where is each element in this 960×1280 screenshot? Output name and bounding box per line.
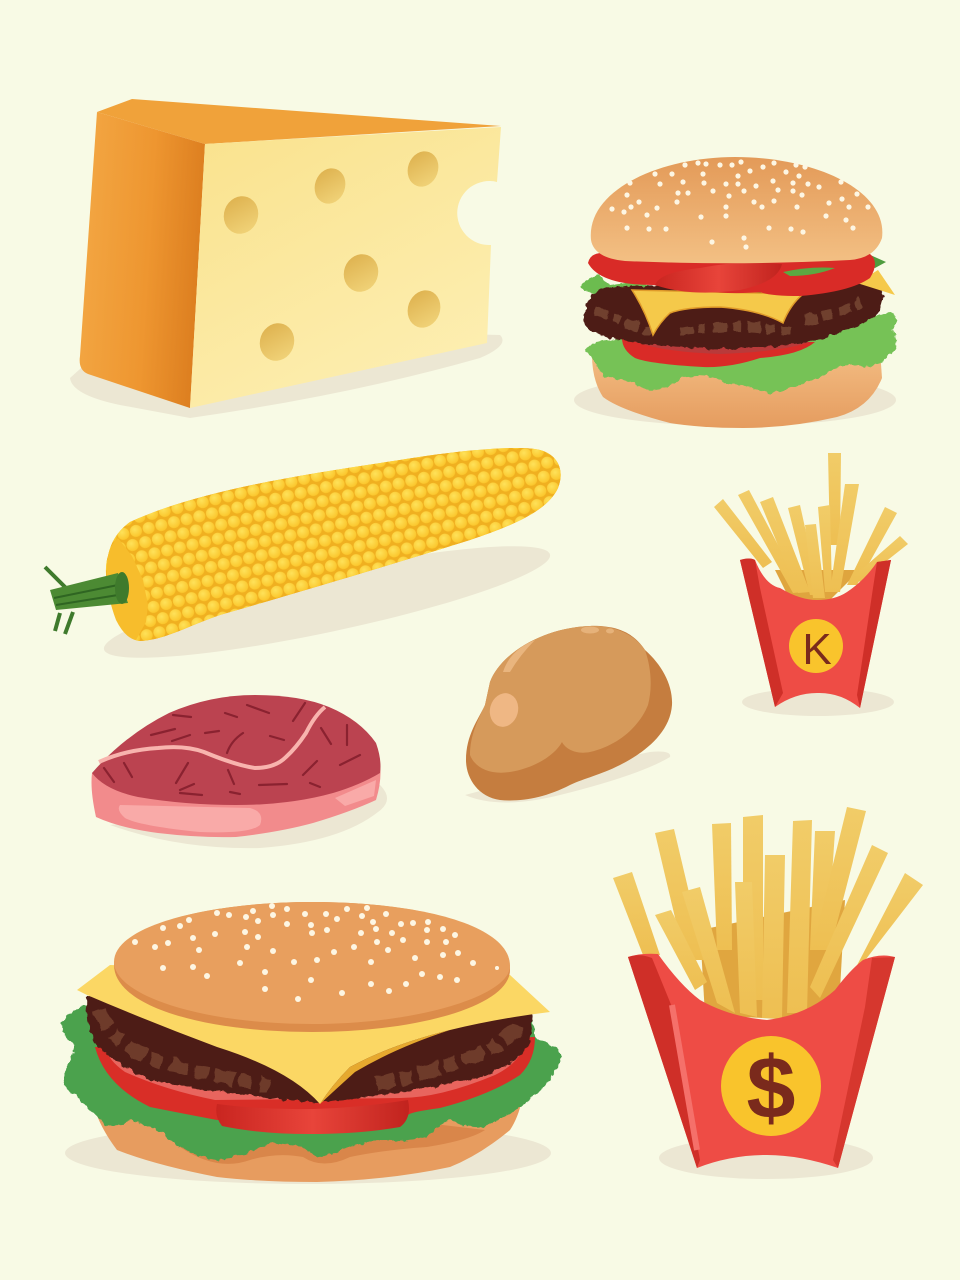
cheese: [77, 965, 550, 1104]
icon: large burger: [62, 902, 560, 1184]
patty: [584, 283, 884, 348]
icon: large fries: [613, 807, 923, 1179]
icon: small fries: [714, 453, 908, 716]
bottom bun: [592, 350, 882, 428]
corn base: [107, 538, 148, 640]
icon: cheese wedge: [70, 99, 502, 418]
icon: potato: [465, 626, 672, 802]
icon: small fries: K: [802, 625, 832, 674]
top tomato slices: [588, 253, 875, 296]
corn husk stem: [45, 567, 129, 634]
icon: corn on the cob: [44, 448, 561, 658]
bottom bun: [92, 1100, 522, 1182]
patty: [87, 960, 533, 1103]
top bun: [114, 902, 510, 1032]
corn kernels: [106, 448, 561, 641]
icon: raw steak: [92, 695, 387, 848]
sesame seeds: [609, 159, 871, 250]
illustration: food collection: [44, 99, 923, 1184]
top bun: [591, 157, 882, 263]
lower lettuce: [585, 313, 897, 393]
sesame seeds: [132, 903, 499, 1002]
lower tomato: [622, 338, 815, 367]
tomato: [95, 1037, 535, 1120]
icon: small burger: [574, 157, 897, 428]
icon: large fries: $: [747, 1038, 795, 1137]
cheese: [632, 290, 803, 335]
upper lettuce: [580, 276, 660, 300]
lettuce: [62, 1005, 560, 1160]
